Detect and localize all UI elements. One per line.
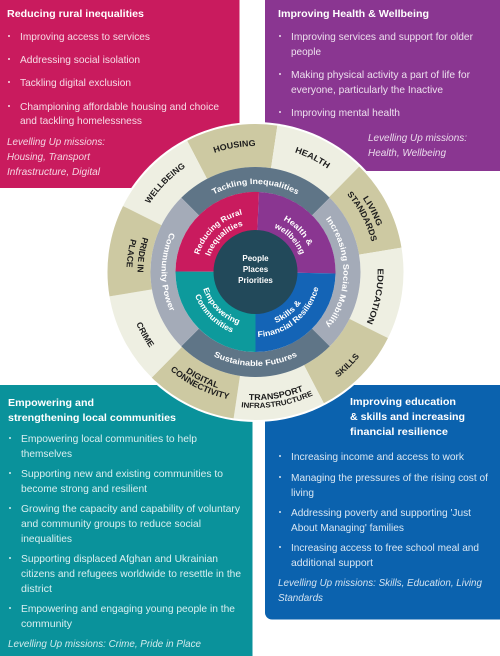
- bullet list: health actions: people: [291, 47, 321, 58]
- bullet list: health actions: Improving services and support for older: [291, 32, 474, 43]
- segment: digital connectivity: CONNECTIVITY: [172, 366, 230, 399]
- bullet list: community actions: district: [21, 584, 52, 595]
- missions note: health: Health, Wellbeing: [368, 148, 446, 159]
- missions note: health: [368, 133, 467, 159]
- segment: digital connectivity: DIGITAL: [186, 368, 218, 388]
- segment: pride in place: PLACE: [126, 239, 136, 268]
- bullet list: education actions: [279, 452, 488, 569]
- bullet list: rural inequalities actions: Addressing social isolation: [20, 55, 140, 66]
- hub: people places priorities: People: [242, 254, 269, 263]
- priority: skills and financial resilience: Skills &: [274, 301, 301, 322]
- heading: empowering and strengthening local communities: [8, 397, 176, 424]
- missions note: rural inequalities: Levelling Up missions:: [7, 137, 105, 148]
- inner ring: priorities: [176, 192, 336, 352]
- bullet list: rural inequalities actions: [8, 32, 219, 127]
- bullet list: education actions: Increasing income and access to work: [291, 452, 465, 463]
- bullet list: community actions: citizens and refugees worldwide to resettle in the: [21, 569, 241, 580]
- panel: empowering local communities: [0, 385, 252, 656]
- segment: housing: HOUSING: [213, 140, 255, 153]
- heading: improving education, skills and financial resilience: & skills and increasing: [350, 411, 465, 423]
- priority: health and wellbeing: wellbeing: [275, 224, 304, 254]
- segment: wellbeing: WELLBEING: [144, 164, 185, 203]
- bullet list: health actions: everyone, particularly the Inactive: [291, 85, 443, 96]
- heading: improving health and wellbeing: Improving Health & Wellbeing: [278, 8, 429, 20]
- bullet list: health actions: Making physical activity a part of life for: [291, 70, 471, 81]
- segment: health: [271, 126, 359, 197]
- bullet list: community actions: become strong and resilient: [21, 484, 147, 495]
- missions note: education: Levelling Up missions: Skills, Education, Living: [278, 578, 482, 589]
- heading: improving education, skills and financial resilience: Improving education: [350, 396, 456, 408]
- missions note: health: Levelling Up missions:: [368, 133, 467, 144]
- bullet list: education actions: Managing the pressures of the rising cost of: [291, 473, 488, 484]
- priority: health and wellbeing: [257, 192, 336, 274]
- middle ring: cross-cutting themes: [150, 167, 360, 377]
- segment: skills: SKILLS: [336, 354, 359, 377]
- bullet list: education actions: Increasing access to free school meal and: [291, 543, 479, 554]
- bullet list: community actions: [9, 434, 241, 630]
- segment: crime: [110, 290, 182, 378]
- missions note: communities: Levelling Up missions: Crime, Pride in Place: [8, 639, 201, 650]
- panel: improving education and skills: [265, 385, 500, 620]
- segment: health: HEALTH: [295, 147, 330, 168]
- segment: living standards: [329, 166, 402, 254]
- segment: transport infrastructure: TRANSPORT: [249, 385, 302, 400]
- bullet list: education actions: additional support: [291, 558, 373, 569]
- priority: empowering communities: Empowering: [203, 287, 240, 326]
- bullet list: community actions: Empowering and engaging young people in the: [21, 604, 235, 615]
- theme: community power: Community Power: [160, 233, 174, 310]
- bullet list: health actions: [279, 32, 474, 119]
- priority: reducing rural inequalities: [176, 192, 259, 272]
- segment: transport infrastructure: INFRASTRUCTURE: [242, 390, 313, 408]
- segment: education: EDUCATION: [366, 269, 384, 324]
- theme: sustainable futures: [181, 328, 330, 377]
- bullet list: education actions: About Managing' families: [291, 523, 404, 534]
- bullet list: rural inequalities actions: Tackling digital exclusion: [20, 78, 131, 89]
- bullet list: health actions: Improving mental health: [291, 108, 400, 119]
- bullet list: rural inequalities actions: and tackling homelessness: [20, 116, 142, 127]
- heading: reducing rural inequalities: Reducing rural inequalities: [7, 8, 144, 20]
- priority: health and wellbeing: Health &: [284, 216, 312, 246]
- missions note: education: Standards: [278, 593, 323, 604]
- priority: empowering communities: Communities: [196, 294, 233, 332]
- missions note: rural inequalities: Infrastructure, Digital: [7, 167, 101, 178]
- hub: people places priorities: Places: [243, 265, 269, 274]
- priority: skills and financial resilience: Financial Resilience: [258, 287, 318, 337]
- priority: skills and financial resilience: [256, 272, 336, 352]
- bullet list: community actions: Supporting new and existing communities to: [21, 469, 223, 480]
- bullet list: education actions: Addressing poverty and supporting 'Just: [291, 508, 471, 519]
- heading: improving education, skills and financial resilience: [350, 396, 465, 438]
- segment: living standards: STANDARDS: [348, 192, 377, 242]
- segment: education: [350, 248, 404, 338]
- heading: empowering and strengthening local communities: strengthening local communities: [8, 412, 176, 424]
- segment: living standards: LIVING: [363, 196, 382, 226]
- bullet list: community actions: community: [21, 619, 73, 630]
- theme: sustainable futures: Sustainable Futures: [214, 352, 297, 366]
- bullet list: community actions: Empowering local communities to help: [21, 434, 197, 445]
- priority: reducing rural inequalities: Reducing Rural: [194, 209, 242, 254]
- hub: people places priorities: [214, 230, 298, 314]
- theme: community power: [150, 198, 199, 346]
- segment: crime: CRIME: [137, 322, 154, 348]
- theme: tackling inequalities: Tackling Inequalities: [211, 178, 298, 194]
- segment: pride in place: [108, 206, 162, 296]
- heading: improving education, skills and financial resilience: financial resilience: [350, 426, 448, 438]
- missions note: rural inequalities: [7, 137, 105, 178]
- bullet list: community actions: inequalities: [21, 534, 72, 545]
- priority: empowering communities: [176, 272, 256, 352]
- panel: reducing rural inequalities: [0, 0, 240, 188]
- heading: empowering and strengthening local communities: Empowering and: [8, 397, 94, 409]
- bullet list: rural inequalities actions: Championing affordable housing and choice: [20, 102, 219, 113]
- bullet list: education actions: living: [291, 488, 314, 499]
- priority: reducing rural inequalities: Inequalities: [205, 222, 242, 256]
- bullet list: community actions: and community groups to reduce social: [21, 519, 201, 530]
- missions note: rural inequalities: Housing, Transport: [7, 152, 91, 163]
- outer ring: levelling up missions: [108, 124, 404, 420]
- theme: tackling inequalities: [181, 167, 330, 216]
- segment: wellbeing: [123, 141, 207, 225]
- segment: housing: [187, 124, 278, 179]
- segment: transport infrastructure: [234, 365, 324, 420]
- panel: improving health and wellbeing: [265, 0, 500, 171]
- theme: increasing social mobility: [312, 198, 360, 346]
- theme: increasing social mobility: Increasing Social Mobility: [326, 216, 349, 328]
- segment: digital connectivity: [152, 347, 240, 418]
- wheel diagram: [108, 122, 404, 422]
- bullet list: rural inequalities actions: Improving access to services: [20, 32, 150, 43]
- bullet list: community actions: Growing the capacity and capability of voluntary: [21, 504, 241, 515]
- missions note: education: [278, 578, 482, 604]
- bullet list: community actions: themselves: [21, 449, 72, 460]
- segment: pride in place: PRIDE IN: [138, 238, 148, 272]
- segment: skills: [304, 319, 388, 404]
- hub: people places priorities: Priorities: [238, 276, 273, 285]
- bullet list: community actions: Supporting displaced Afghan and Ukrainian: [21, 554, 218, 565]
